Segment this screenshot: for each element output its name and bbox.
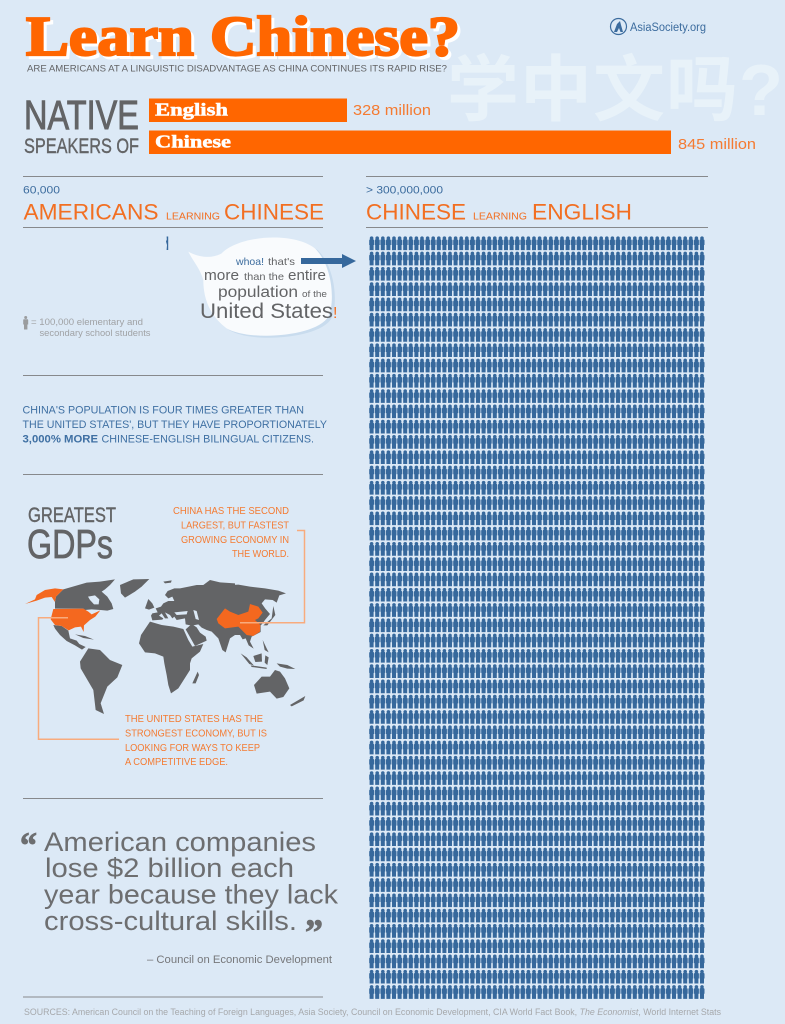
- quote: ”: [305, 912, 323, 952]
- Alaska: [25, 588, 63, 604]
- text block: bilingual citizens: 3,000% MORE: [22, 434, 99, 446]
- text block: bilingual citizens: CHINA'S POPULATION IS FOUR TIMES GREATER THAN: [22, 404, 304, 416]
- text block: US economy: THE UNITED STATES HAS THE: [125, 714, 263, 725]
- callout: speech bubble: that's: [268, 256, 295, 268]
- eastern Asia: [232, 585, 286, 649]
- title: Learn Chinese?: [29, 9, 463, 71]
- quote: [20, 825, 339, 952]
- panel: Chinese learning English: > 300,000,000: [366, 184, 443, 196]
- callout: speech bubble: entire: [288, 267, 326, 284]
- text block: bilingual citizens: [22, 404, 328, 446]
- Arabia: [186, 624, 207, 646]
- UK: [145, 599, 154, 610]
- text block: US economy: A COMPETITIVE EDGE.: [125, 757, 228, 768]
- quote: cross-cultural skills.: [44, 906, 297, 936]
- text block: China economy: GROWING ECONOMY IN: [181, 535, 289, 546]
- bar: English 328 million: English: [155, 100, 228, 120]
- text block: US economy: [125, 714, 267, 768]
- Australia: [254, 670, 289, 699]
- subtitle: ARE AMERICANS AT A LINGUISTIC DISADVANTAGE AS CHINA CONTINUES ITS RAPID RISE?: [27, 64, 447, 74]
- callout: speech bubble: !: [333, 305, 337, 322]
- panel: Americans learning Chinese: 60,000: [23, 184, 60, 196]
- heading: greatest GDPs: GREATEST: [28, 504, 116, 527]
- callout: speech bubble: of the: [302, 289, 327, 300]
- heading: native speakers of: SPEAKERS OF: [24, 135, 139, 158]
- panel: Chinese learning English: LEARNING: [473, 210, 527, 222]
- New Zealand: [290, 696, 305, 706]
- legend: person equals 100,000: [23, 316, 151, 339]
- text block: China economy: CHINA HAS THE SECOND: [173, 506, 289, 517]
- heading: native speakers of: [24, 92, 139, 158]
- Africa: [139, 622, 203, 693]
- panel: Americans learning Chinese: LEARNING: [166, 210, 220, 222]
- quote: year because they lack: [44, 880, 339, 910]
- heading: greatest GDPs: GDPs: [27, 521, 113, 567]
- callout: speech bubble: population: [218, 284, 298, 301]
- quote: “: [20, 825, 37, 865]
- China: [217, 604, 263, 636]
- text block: bilingual citizens: CHINESE-ENGLISH BILINGUAL CITIZENS.: [102, 434, 314, 446]
- United States: [51, 609, 100, 632]
- callout: speech bubble: United States: [200, 300, 333, 323]
- Madagascar: [192, 672, 199, 683]
- Europe and western Asia: [151, 580, 235, 652]
- quote attribution: – Council on Economic Development: [147, 954, 332, 966]
- callout: speech bubble: more: [204, 267, 239, 284]
- South America: [80, 648, 122, 714]
- text block: China economy: THE WORLD.: [232, 549, 289, 560]
- icon: partial person: [166, 236, 168, 250]
- pictogram: 3000 people grid: [369, 236, 704, 999]
- panel: Chinese learning English: CHINESE: [366, 200, 466, 224]
- logo: AsiaSociety.org: [610, 18, 706, 34]
- heading: greatest GDPs: [27, 504, 116, 567]
- text block: China economy: [173, 506, 290, 560]
- americas: [25, 579, 149, 650]
- legend: person equals 100,000: secondary school students: [40, 328, 151, 339]
- panel: Americans learning Chinese: AMERICANS: [24, 200, 158, 224]
- bar: Chinese 845 million: Chinese: [155, 132, 231, 152]
- logo: AsiaSociety.org: AsiaSociety.org: [630, 22, 706, 34]
- bar: English 328 million: 328 million: [353, 103, 431, 119]
- connector: United States: [38, 618, 119, 739]
- world map: [25, 579, 305, 714]
- connector: China: [240, 530, 304, 623]
- arrow: [301, 254, 356, 268]
- callout: speech bubble: [188, 238, 337, 338]
- panel: Chinese learning English: ENGLISH: [532, 200, 632, 224]
- text block: US economy: LOOKING FOR WAYS TO KEEP: [125, 743, 260, 754]
- text block: US economy: STRONGEST ECONOMY, BUT IS: [125, 728, 267, 740]
- watermark: Chinese title: 学中文吗?: [447, 51, 783, 131]
- quote: lose $2 billion each: [45, 853, 294, 883]
- bar: Chinese 845 million: [149, 130, 756, 154]
- panel: Chinese learning English: [366, 184, 632, 224]
- panel: Americans learning Chinese: CHINESE: [224, 200, 324, 224]
- bar: English 328 million: [149, 98, 431, 122]
- quote: American companies: [44, 827, 316, 857]
- text block: China economy: LARGEST, BUT FASTEST: [181, 520, 290, 532]
- callout: speech bubble: whoa!: [235, 256, 264, 268]
- sources: SOURCES: American Council on the Teaching of Foreign Languages, Asia Society, Council on Economic Development, CIA World Fact Book, The Economist, World Internet Stats: [24, 1007, 721, 1017]
- callout: speech bubble: than the: [244, 271, 284, 283]
- heading: native speakers of: NATIVE: [24, 92, 139, 138]
- bar: Chinese 845 million: 845 million: [678, 137, 756, 153]
- panel: Americans learning Chinese: [23, 184, 324, 250]
- legend: person equals 100,000: = 100,000 elementary and: [31, 317, 143, 328]
- title: Learn Chinese?: [26, 6, 460, 68]
- text block: bilingual citizens: THE UNITED STATES', BUT THEY HAVE PROPORTIONATELY: [22, 419, 328, 431]
